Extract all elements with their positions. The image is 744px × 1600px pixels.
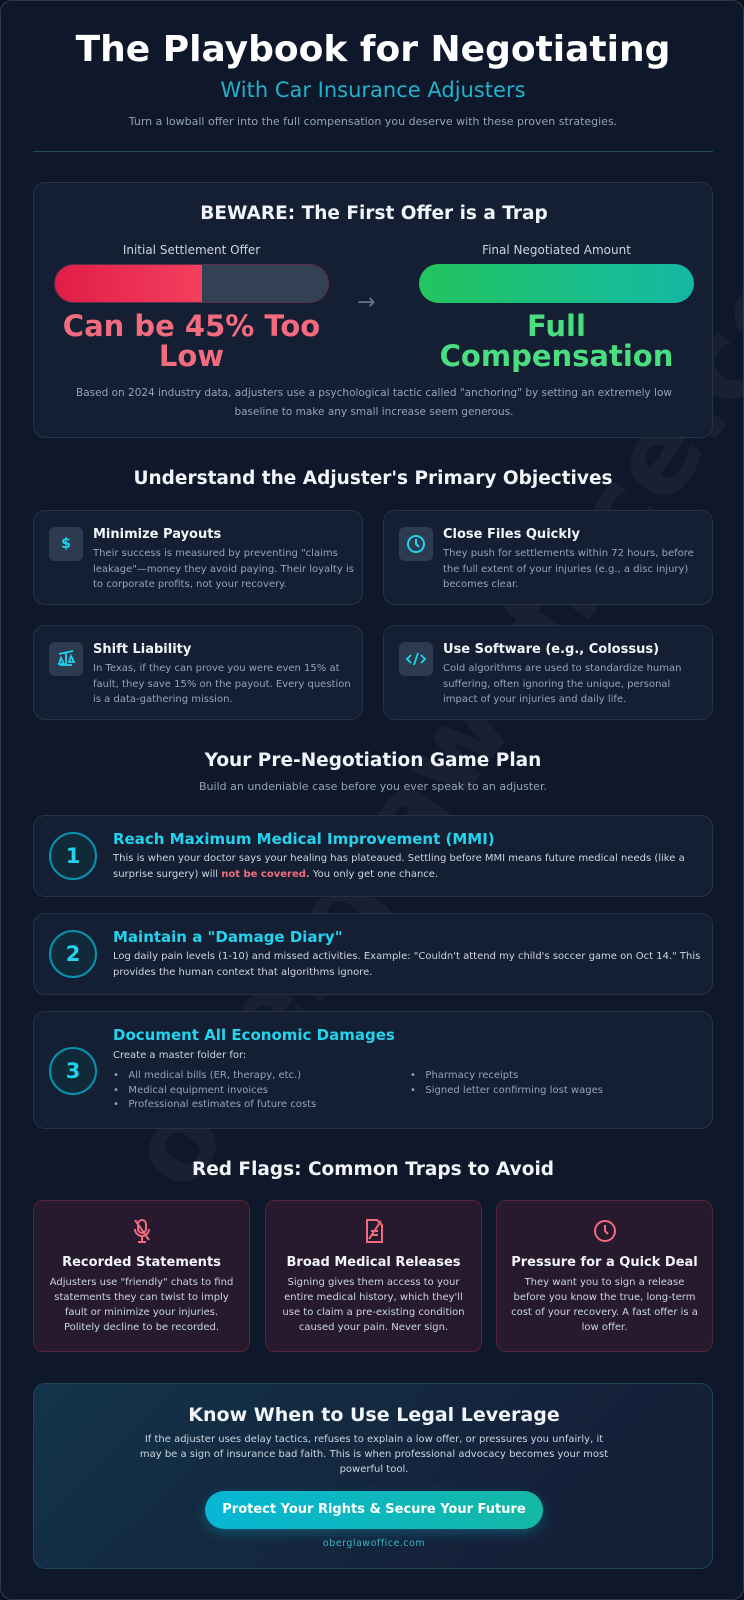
panel: quick deal: They want you to sign a release before you know the true, long-term cost of your recovery. A fast offer is a low offer. xyxy=(511,1277,698,1333)
panel: use software xyxy=(383,625,713,720)
full compensation text: Full Compensation xyxy=(440,309,673,373)
panel: shift liability xyxy=(33,625,363,720)
step 3: 3 xyxy=(66,1059,80,1083)
step 2: 2 xyxy=(66,942,80,966)
icon: code xyxy=(399,642,433,676)
step 2 xyxy=(33,913,713,995)
final amount label: Final Negotiated Amount xyxy=(482,243,631,257)
step 3: • All medical bills (ER, therapy, etc.) xyxy=(113,1070,301,1081)
text: If the adjuster uses delay tactics, refuses to explain a low offer, or pressures you unfairly, it may be a sign of insurance bad faith. This is when professional advocacy becomes your most powerful tool. xyxy=(140,1434,608,1475)
title: The Playbook for Negotiating xyxy=(76,29,670,70)
panel: shift liability: In Texas, if they can prove you were even 15% at fault, they save 15% on the payout. Every question is a data-gathering mission. xyxy=(93,663,351,705)
step 1: 1 xyxy=(66,844,80,868)
button: Protect Your Rights & Secure Your Future xyxy=(222,1502,526,1517)
panel: close files quickly: Close Files Quickly xyxy=(443,527,580,542)
heading: red flags: Red Flags: Common Traps to Avoid xyxy=(192,1159,554,1180)
step 3: • Signed letter confirming lost wages xyxy=(410,1084,603,1096)
panel: close files quickly xyxy=(383,510,713,605)
tagline: Turn a lowball offer into the full compensation you deserve with these proven strategies. xyxy=(129,115,617,128)
panel: legal leverage CTA xyxy=(33,1383,713,1569)
panel: recorded statements: Adjusters use "friendly" chats to find statements they can twist to imply fault or minimize your injuries. Politely decline to be recorded. xyxy=(50,1277,233,1333)
panel: first offer trap xyxy=(33,182,713,438)
subheading: Build an undeniable case before you ever speak to an adjuster. xyxy=(199,780,547,793)
step 3: • Professional estimates of future costs xyxy=(113,1099,316,1110)
bullet list xyxy=(113,1070,603,1110)
step 1: Reach Maximum Medical Improvement (MMI) xyxy=(113,830,495,848)
panel: recorded statements: Recorded Statements xyxy=(62,1255,221,1270)
subtitle: With Car Insurance Adjusters xyxy=(220,78,526,102)
panel: use software: Use Software (e.g., Colossus) xyxy=(443,642,659,657)
step 1 xyxy=(33,815,713,897)
arrow: → xyxy=(357,290,375,315)
icon: dollar xyxy=(49,527,83,561)
icon: document xyxy=(366,1219,383,1243)
panel: quick deal xyxy=(496,1200,713,1352)
bar: final amount xyxy=(419,264,694,303)
panel: shift liability: Shift Liability xyxy=(93,642,191,657)
step 1: This is when your doctor says your healing has plateaued. Settling before MMI means future medical needs (like a surprise surgery) will not be covered. You only get one chance. xyxy=(113,853,685,880)
explanation: Based on 2024 industry data, adjusters use a psychological tactic called "anchoring" by setting an extremely low baseline to make any small increase seem generous. xyxy=(76,387,672,418)
panel: medical releases xyxy=(265,1200,482,1352)
panel: close files quickly: They push for settlements within 72 hours, before the full extent of your injuries (e.g., a disc injury) becomes clear. xyxy=(443,548,694,590)
heading: game plan: Your Pre-Negotiation Game Plan xyxy=(205,750,541,771)
icon: clock xyxy=(399,527,433,561)
panel: recorded statements xyxy=(33,1200,250,1352)
panel: use software: Cold algorithms are used to standardize human suffering, often ignoring the unique, personal impact of your injuries and daily life. xyxy=(443,663,681,705)
button xyxy=(205,1491,543,1529)
step 2: Maintain a "Damage Diary" xyxy=(113,928,343,946)
bar: initial offer xyxy=(54,264,329,303)
icon: muted mic xyxy=(134,1219,150,1243)
panel: minimize payouts: Their success is measured by preventing "claims leakage"—money they avoid paying. Their loyalty is to corporate profits, not your recovery. xyxy=(93,548,354,590)
step 2: Log daily pain levels (1-10) and missed activities. Example: "Couldn't attend my child's soccer game on Oct 14." This provides the human context that algorithms ignore. xyxy=(113,951,700,978)
heading: Know When to Use Legal Leverage xyxy=(188,1404,560,1426)
url: oberglawoffice.com xyxy=(323,1538,425,1549)
step 3: Create a master folder for: xyxy=(113,1050,246,1061)
step 3: • Pharmacy receipts xyxy=(410,1070,518,1081)
heading: BEWARE: The First Offer is a Trap xyxy=(200,203,548,224)
icon: dollar: $ xyxy=(61,536,71,552)
icon: scale xyxy=(49,642,83,676)
panel: medical releases: Broad Medical Releases xyxy=(286,1255,460,1270)
step 3: Document All Economic Damages xyxy=(113,1026,395,1044)
step 3 xyxy=(33,1011,713,1129)
icon: clock xyxy=(594,1220,616,1242)
low percent text: Can be 45% Too Low xyxy=(63,309,320,373)
panel: minimize payouts: Minimize Payouts xyxy=(93,527,221,542)
step 3: • Medical equipment invoices xyxy=(113,1084,268,1096)
panel: quick deal: Pressure for a Quick Deal xyxy=(511,1255,698,1270)
panel: medical releases: Signing gives them access to your entire medical history, which they'll use to claim a pre-existing condition caused your pain. Never sign. xyxy=(282,1277,465,1333)
panel: minimize payouts xyxy=(33,510,363,605)
heading: objectives: Understand the Adjuster's Primary Objectives xyxy=(133,468,613,489)
initial offer label: Initial Settlement Offer xyxy=(123,243,260,257)
